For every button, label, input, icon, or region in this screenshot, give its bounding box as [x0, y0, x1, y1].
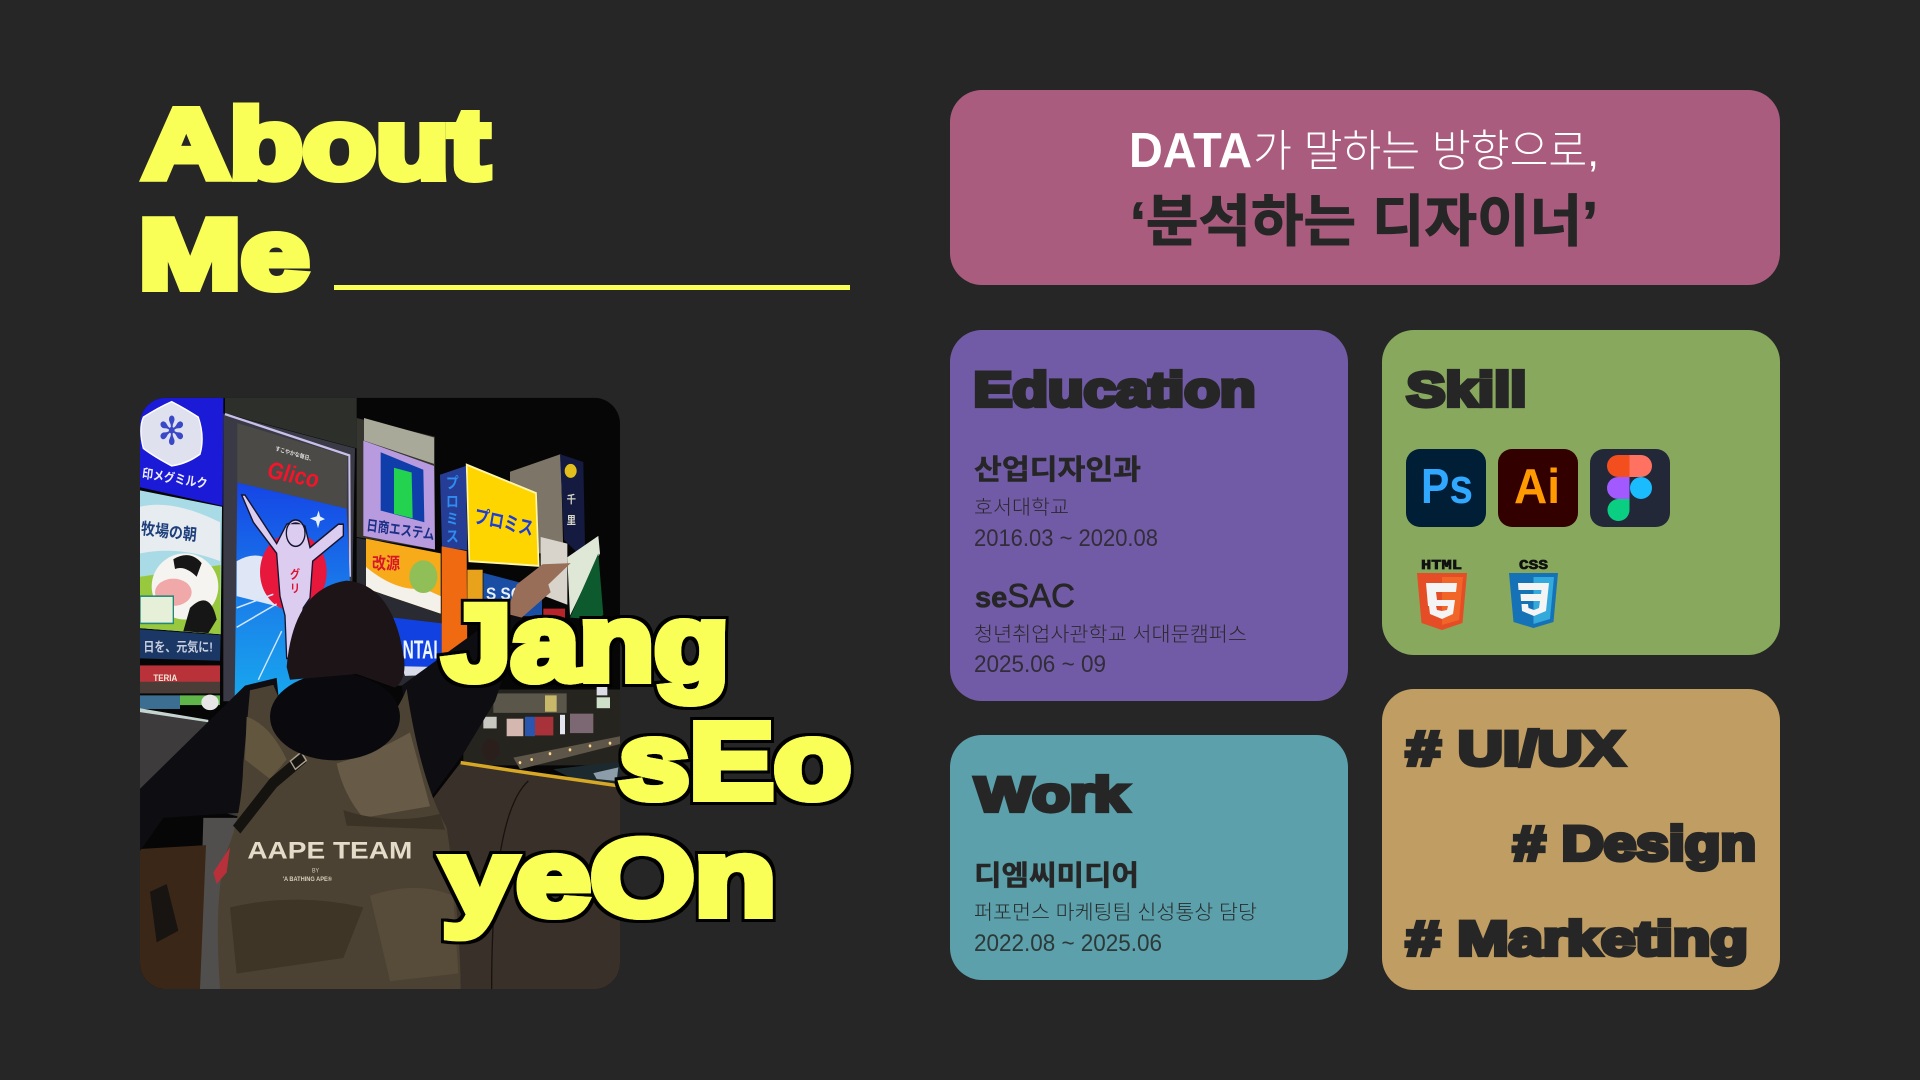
entry: industrial design: 산업디자인과 — [974, 454, 1141, 485]
sign: Promise: ロ — [446, 494, 459, 510]
icon: Illustrator: Ai — [1514, 460, 1560, 514]
sign: cow — [140, 490, 222, 661]
sign: Promise: ス — [446, 529, 459, 545]
name: Jang sEo yeOn: yeOn — [442, 817, 776, 938]
entry: industrial design: 호서대학교 — [974, 496, 1069, 519]
sign: Glico runner: リ — [290, 583, 300, 596]
person: vest: BY — [312, 868, 319, 875]
icon: CSS3 — [1509, 558, 1558, 628]
headline line 1 — [1129, 124, 1599, 178]
sign: Promise: プ — [446, 475, 459, 491]
person: hood and hair — [270, 581, 404, 760]
sign: Kaigen: 改源 — [372, 555, 400, 573]
sign: Promise: ミ — [446, 511, 459, 527]
sign: right banners: 里 — [567, 515, 576, 527]
panel: keyword tags — [1382, 689, 1780, 990]
sign: Kaigen — [357, 538, 442, 686]
entry: DMC Media — [974, 860, 1257, 957]
sign: snow brand: 印メグミルク — [141, 465, 208, 491]
headline line 2: ‘분석하는 디자이너’ — [1130, 190, 1598, 253]
sign: Promise: プロミス — [473, 505, 535, 540]
person: vest: 'A BATHING APE® — [283, 876, 332, 883]
sign: Nissho Estem: 日商エステム — [366, 516, 435, 543]
sign: snow brand: ✻ — [158, 409, 186, 453]
name: Jang sEo yeOn: Jang — [443, 582, 729, 703]
sign: Glico runner: グ — [290, 567, 300, 582]
panel: education — [950, 330, 1348, 701]
panel: work — [950, 735, 1348, 980]
sign: Nissho Estem — [357, 418, 435, 549]
heading: Education: Education — [974, 364, 1256, 417]
icon: HTML5: HTML — [1421, 558, 1462, 574]
entry: industrial design — [974, 454, 1158, 552]
panel: skill — [1382, 330, 1780, 655]
person: vest — [213, 685, 461, 989]
tag: UI/UX: # UI/UX — [1406, 723, 1624, 776]
icon: Illustrator — [1498, 449, 1578, 527]
sign: Promise — [440, 454, 563, 662]
headline line 1: 가 말하는 방향으로, — [1253, 127, 1599, 176]
entry: DMC Media: 퍼포먼스 마케팅팀 신성통상 담당 — [974, 901, 1257, 924]
entry: seSAC: 청년취업사관학교 서대문캠퍼스 — [974, 623, 1247, 646]
person: dark jacket arms — [140, 563, 571, 851]
icon: Photoshop — [1406, 449, 1486, 527]
riverside shops — [463, 687, 620, 784]
sign: Promise: S SO — [486, 583, 523, 604]
entry: industrial design: 2016.03 ~ 2020.08 — [974, 525, 1158, 552]
sign: small shop: TERIA — [153, 672, 178, 683]
name: Jang sEo yeOn — [442, 582, 851, 938]
tag: Marketing: # Marketing — [1406, 913, 1748, 966]
person: vest: AAPE TEAM — [247, 837, 412, 864]
icon: Figma — [1590, 449, 1670, 527]
icon: CSS3: CSS — [1519, 558, 1548, 574]
entry: DMC Media: 디엠씨미디어 — [974, 860, 1139, 891]
headline line 1: DATA — [1129, 124, 1252, 178]
heading: Skill: Skill — [1406, 364, 1526, 417]
stone ledge — [140, 712, 620, 989]
name: Jang sEo yeOn: sEo — [619, 700, 851, 821]
sign: cow: 日を、元気に! — [143, 639, 213, 655]
sign: right banners: 千 — [567, 492, 576, 506]
entry: seSAC — [974, 577, 1247, 678]
sign: Glico runner: Glico — [266, 456, 321, 493]
title: About Me: Me — [139, 199, 309, 309]
entry: seSAC: 2025.06 ~ 09 — [974, 651, 1106, 678]
tag: Design: # Design — [1513, 818, 1756, 871]
sign: small shop — [140, 665, 220, 723]
icon: Photoshop: Ps — [1421, 460, 1473, 514]
entry: seSAC: seSAC — [975, 577, 1075, 614]
sign: snow brand — [140, 398, 223, 506]
title: About Me: About — [143, 89, 489, 199]
sign: Glico runner — [223, 413, 355, 701]
sign: Kaigen: NTAI — [403, 636, 438, 665]
title: About Me — [139, 89, 850, 309]
sign: Glico runner: すこやかな毎日、 — [275, 444, 315, 464]
panel: headline — [950, 90, 1780, 285]
photo: person waving at Dotonbori signs — [140, 398, 620, 989]
entry: DMC Media: 2022.08 ~ 2025.06 — [974, 930, 1162, 957]
heading: Work: Work — [975, 769, 1128, 822]
sign: right banners — [541, 454, 603, 624]
sign: cow: 牧場の朝 — [140, 519, 198, 545]
icon: HTML5 — [1417, 558, 1467, 630]
